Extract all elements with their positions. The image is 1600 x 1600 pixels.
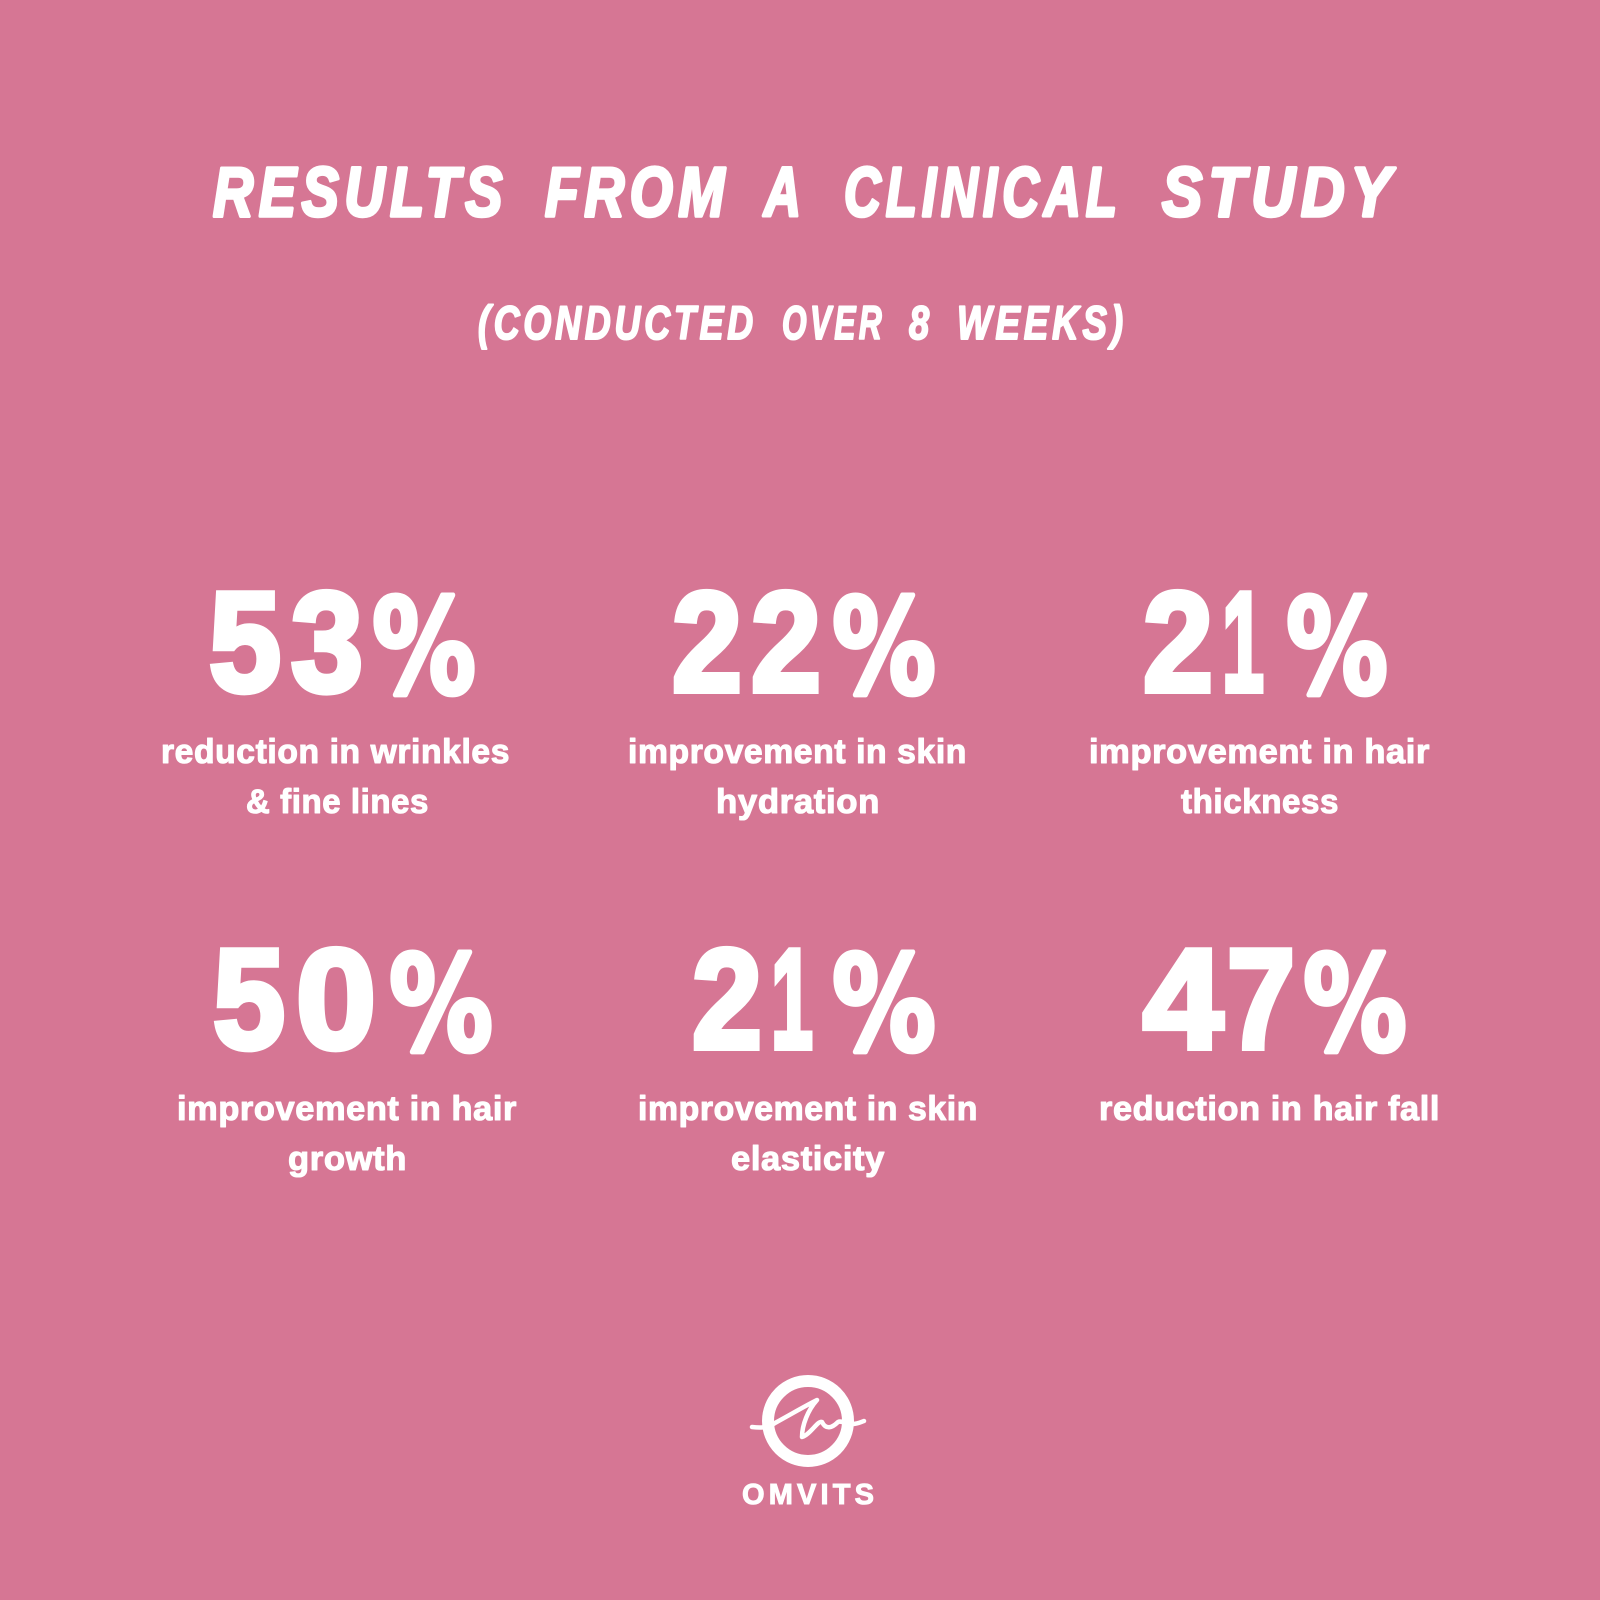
stat: 53% reduction in wrinkles and fine lines: % xyxy=(372,571,476,725)
stat: 53% reduction in wrinkles and fine lines: & fine lines xyxy=(246,783,429,821)
stat: 21% improvement in skin elasticity xyxy=(638,920,978,1178)
subtitle: (CONDUCTED xyxy=(478,296,757,349)
stat: 53% reduction in wrinkles and fine lines: 3 xyxy=(291,563,363,722)
stat: 47% reduction in hair fall: 4 xyxy=(1143,920,1223,1079)
logo: Omvits xyxy=(742,1381,874,1511)
stat: 22% improvement in skin hydration: 2 xyxy=(751,563,821,722)
stat: 21% improvement in skin elasticity: 2 xyxy=(692,920,762,1079)
icon: ring with signature wave xyxy=(752,1381,864,1461)
stat: 21% improvement in skin elasticity: % xyxy=(832,928,936,1082)
subtitle: WEEKS) xyxy=(957,296,1127,349)
stat: 47% reduction in hair fall: reduction in hair fall xyxy=(1099,1090,1440,1128)
stat: 21% improvement in skin elasticity: improvement in skin xyxy=(638,1090,978,1128)
stat: 53% reduction in wrinkles and fine lines: reduction in wrinkles xyxy=(161,733,510,771)
title xyxy=(213,153,1397,231)
stat: 50% improvement in hair growth: 5 xyxy=(213,920,285,1079)
stat: 21% improvement in skin elasticity: elasticity xyxy=(731,1140,885,1178)
subtitle xyxy=(478,296,1127,349)
stat: 22% improvement in skin hydration xyxy=(628,563,967,821)
subtitle: OVER xyxy=(782,296,885,349)
stat: 53% reduction in wrinkles and fine lines xyxy=(161,563,510,821)
stat: 21% improvement in hair thickness: improvement in hair xyxy=(1089,733,1430,771)
stat: 50% improvement in hair growth: growth xyxy=(288,1140,407,1178)
stat: 21% improvement in hair thickness xyxy=(1089,563,1430,821)
stat: 22% improvement in skin hydration: % xyxy=(832,571,936,725)
title: CLINICAL xyxy=(844,153,1122,231)
stat: 50% improvement in hair growth: % xyxy=(389,928,493,1082)
stat: 21% improvement in hair thickness: thickness xyxy=(1181,783,1339,821)
subtitle: 8 xyxy=(909,296,933,349)
stat: 22% improvement in skin hydration: hydration xyxy=(716,783,880,821)
stat: 53% reduction in wrinkles and fine lines: 5 xyxy=(209,563,281,722)
stat: 21% improvement in hair thickness: % xyxy=(1286,571,1388,725)
title: FROM xyxy=(545,153,730,231)
stat: 47% reduction in hair fall xyxy=(1099,920,1440,1128)
title: RESULTS xyxy=(213,153,508,231)
stat: 21% improvement in skin elasticity: 1 xyxy=(771,920,813,1079)
stat: 21% improvement in hair thickness: 1 xyxy=(1222,563,1264,722)
stat: 47% reduction in hair fall: 7 xyxy=(1227,920,1295,1079)
stat: 50% improvement in hair growth: 0 xyxy=(296,920,376,1079)
stat: 50% improvement in hair growth: improvement in hair xyxy=(177,1090,517,1128)
stat: 22% improvement in skin hydration: 2 xyxy=(672,563,742,722)
title: A xyxy=(763,153,806,231)
wordmark: OMVITS xyxy=(742,1479,874,1511)
title: STUDY xyxy=(1162,153,1397,231)
stat: 50% improvement in hair growth xyxy=(177,920,517,1178)
stat: 21% improvement in hair thickness: 2 xyxy=(1143,563,1213,722)
stat: 22% improvement in skin hydration: improvement in skin xyxy=(628,733,967,771)
stat: 47% reduction in hair fall: % xyxy=(1303,928,1407,1082)
